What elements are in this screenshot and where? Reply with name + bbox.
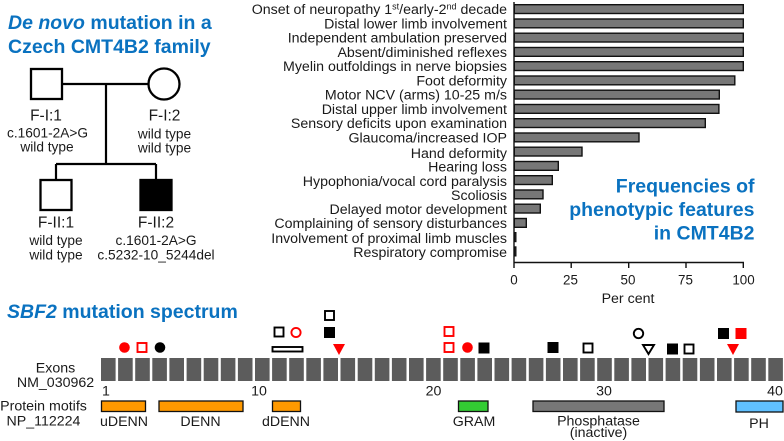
- protein motif: GRAM: [453, 401, 495, 430]
- category labels: Complaining of sensory disturbances: [274, 216, 507, 232]
- category labels: Distal upper limb involvement: [322, 102, 507, 118]
- marker: exon 14 group: [324, 311, 345, 355]
- protein motif: PH: [736, 401, 783, 432]
- label: exons: NM_030962: [17, 375, 94, 391]
- heading: de novo mutation: De novo mutation in a: [8, 12, 212, 34]
- exon numbers: [102, 384, 783, 400]
- category labels: decade: [456, 2, 507, 18]
- exon numbers: 1: [102, 384, 110, 400]
- icon: affected son F-II:2: [140, 180, 172, 210]
- label: F-II:1: wild type: [28, 233, 83, 248]
- protein motif: DENN: DENN: [180, 414, 221, 430]
- label: F-II:1: [28, 214, 83, 262]
- axis title: Per cent: [602, 291, 654, 307]
- category labels: Motor NCV (arms) 10-25 m/s: [325, 88, 507, 104]
- category labels: Involvement of proximal limb muscles: [271, 231, 507, 247]
- heading: de novo mutation: [8, 12, 212, 58]
- marker: exon 37-38 group: [718, 328, 746, 355]
- exon numbers: 10: [251, 384, 267, 400]
- category labels: Onset of neuropathy 1: [252, 2, 392, 18]
- category labels: /early-2: [399, 2, 447, 18]
- protein motif: Phosphatase: [533, 401, 664, 441]
- category labels: Hypophonia/vocal cord paralysis: [303, 174, 507, 190]
- label: F-I:1: [7, 108, 88, 154]
- icon: mother F-I:2: [148, 68, 180, 100]
- label: F-II:2: [97, 214, 215, 262]
- category labels: Hearing loss: [428, 160, 507, 176]
- label: F-II:1: wild type: [28, 248, 83, 262]
- protein motif: Phosphatase: Phosphatase: [557, 414, 640, 430]
- category labels: nd: [446, 2, 456, 12]
- heading: frequencies of phenotypic features: [569, 176, 755, 244]
- axis tick labels: 75: [678, 272, 693, 288]
- icon: father F-I:1: [31, 69, 62, 99]
- marker: exon 1-3 group: [119, 342, 165, 353]
- label: F-I:1: F-I:1: [30, 108, 62, 124]
- label: F-I:2: F-I:2: [149, 108, 180, 124]
- category labels: Distal lower limb involvement: [324, 16, 507, 32]
- axis tick labels: 50: [621, 272, 635, 288]
- label: exons: [17, 361, 94, 391]
- label: F-II:1: F-II:1: [38, 214, 74, 232]
- label: F-I:2: wild type: [137, 126, 191, 142]
- heading: SBF2 mutation spectrum: SBF2 mutation spectrum: [7, 301, 238, 323]
- pedigree chart: [7, 68, 215, 262]
- category labels: Hand deformity: [411, 146, 508, 162]
- label: protein motifs: NP_112224: [7, 413, 81, 429]
- axis tick labels: 0: [510, 272, 518, 288]
- axis tick labels: 25: [563, 272, 578, 288]
- mutation markers: [119, 311, 746, 355]
- protein motif: DENN: [159, 401, 243, 430]
- category labels: Delayed motor development: [330, 202, 507, 218]
- protein motif: uDENN: [100, 401, 148, 430]
- category labels: Absent/diminished reflexes: [337, 45, 507, 61]
- label: protein motifs: [0, 399, 87, 429]
- axis tick labels: 100: [732, 272, 755, 288]
- protein motif: dDENN: [262, 401, 310, 430]
- marker: exon 10-12 group: [272, 328, 302, 352]
- x axis: [514, 2, 744, 268]
- heading: frequencies of phenotypic features: phenotypic features: [569, 199, 755, 221]
- exon numbers: 30: [596, 384, 612, 400]
- label: F-I:1: wild type: [19, 140, 74, 154]
- axis tick labels: [510, 272, 755, 288]
- exon numbers: 40: [767, 384, 783, 400]
- exon numbers: 20: [426, 384, 441, 400]
- protein motif: PH: PH: [749, 416, 769, 432]
- category labels: Sensory deficits upon examination: [291, 116, 507, 132]
- label: F-II:2: F-II:2: [138, 214, 174, 232]
- protein motif: Phosphatase: (inactive): [570, 425, 627, 441]
- marker: exon 33-36 group: [634, 329, 694, 354]
- category labels: Myelin outfoldings in nerve biopsies: [283, 59, 507, 75]
- protein motif: uDENN: uDENN: [100, 414, 148, 430]
- icon: son F-II:1: [40, 180, 72, 210]
- label: F-II:2: c.5232-10_5244del: [97, 248, 215, 262]
- bars: [514, 5, 743, 256]
- label: F-I:2: wild type: [137, 140, 191, 156]
- heading: de novo mutation: Czech CMT4B2 family: [8, 36, 211, 58]
- marker: exon 27-29 group: [548, 342, 592, 353]
- category labels: st: [392, 2, 400, 12]
- label: F-I:1: c.1601-2A>G: [7, 126, 88, 140]
- category labels: Scoliosis: [451, 188, 507, 204]
- protein motif: GRAM: GRAM: [453, 414, 495, 430]
- category labels: Independent ambulation preserved: [288, 31, 507, 47]
- bar chart: phenotypic features: [252, 2, 755, 307]
- label: F-I:2: [137, 108, 191, 156]
- category labels: Foot deformity: [416, 74, 508, 90]
- label: F-II:2: c.1601-2A>G: [115, 233, 197, 248]
- exon track: [101, 358, 783, 381]
- marker: exon 21-23 group: [444, 327, 490, 354]
- heading: frequencies of phenotypic features: Frequencies of: [616, 176, 755, 198]
- protein motif: dDENN: dDENN: [262, 414, 310, 430]
- category labels: Respiratory compromise: [353, 245, 507, 261]
- category labels: Glaucoma/increased IOP: [348, 130, 507, 146]
- label: protein motifs: Protein motifs: [0, 399, 87, 415]
- category labels: [252, 2, 508, 261]
- label: exons: Exons: [36, 361, 75, 377]
- heading: frequencies of phenotypic features: in CMT4B2: [654, 222, 755, 244]
